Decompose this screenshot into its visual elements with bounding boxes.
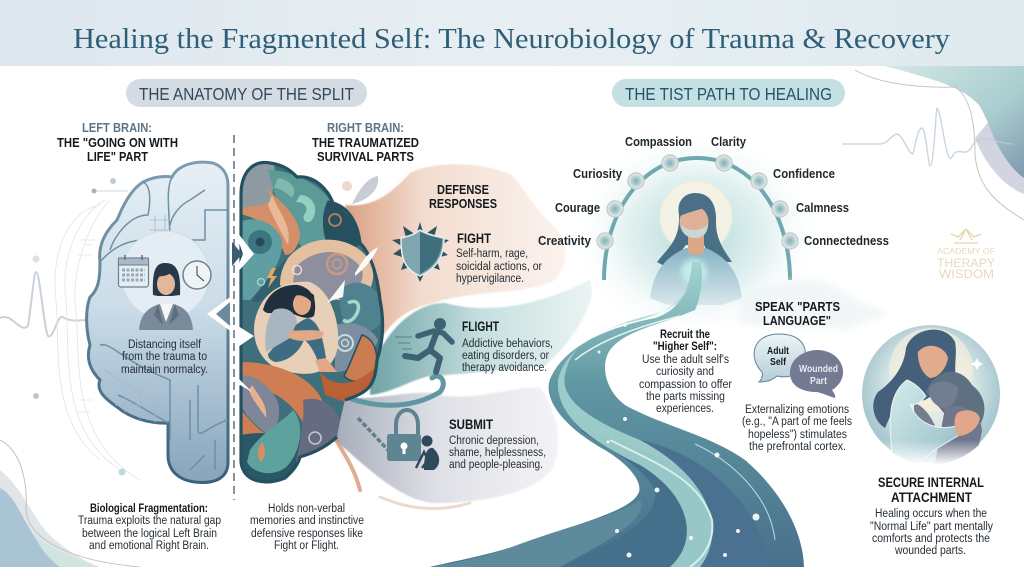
icon: wounded part speech bubble: Wounded <box>799 363 838 375</box>
icon: wounded part speech bubble <box>790 350 843 398</box>
neck <box>688 232 704 255</box>
foot <box>315 358 337 372</box>
text: left brain caption <box>121 339 208 376</box>
swirl: orange flame <box>240 186 300 255</box>
decorative swoosh: bottom left <box>0 440 140 567</box>
text: recruit the higher self: the parts missing <box>646 391 725 403</box>
icon: adult self speech bubble: Self <box>770 356 786 368</box>
text: secure internal attachment: comforts and protects the <box>872 533 990 545</box>
text: externalizing emotions: Externalizing emotions <box>745 404 849 416</box>
river dark lower band <box>560 430 738 567</box>
text: eight Cs labels: Curiosity <box>573 167 622 181</box>
decorative contour lines left of brain <box>55 200 140 480</box>
text: right brain caption <box>250 503 364 552</box>
logo: academy of therapy wisdom: WISDOM <box>939 267 994 281</box>
swirl: grey-blue <box>335 323 378 372</box>
section pill: anatomy of the split <box>126 79 367 107</box>
heading: left brain: THE "GOING ON WITH <box>57 136 178 150</box>
mother hand <box>954 410 980 436</box>
swirl: grey inner <box>292 252 363 300</box>
child head <box>929 381 958 408</box>
decorative pulse line: right <box>842 108 1012 166</box>
heading: right brain: RIGHT BRAIN: <box>327 121 404 135</box>
text: eight Cs labels <box>538 135 889 248</box>
text: right brain caption: memories and instinctive <box>250 515 364 527</box>
text: recruit the higher self: Use the adult self's <box>642 354 729 366</box>
decorative dots <box>32 178 128 476</box>
aura behind girl <box>254 282 338 374</box>
figure: woman in suit <box>139 263 193 330</box>
text: secure internal attachment: "Normal Life" part mentally <box>870 521 993 533</box>
divider: dashed split line <box>233 135 235 500</box>
text: secure internal attachment <box>870 475 993 557</box>
icon: adult self speech bubble: Adult <box>767 345 789 357</box>
text: secure internal attachment: wounded parts. <box>894 545 966 557</box>
text: biological fragmentation: Biological Fragmentation: <box>90 503 208 515</box>
face <box>293 293 311 315</box>
text: fight: FIGHT <box>457 231 492 246</box>
heading: speak parts language <box>755 300 840 328</box>
text: secure internal attachment: Healing occurs when the <box>875 508 987 520</box>
text: submit: SUBMIT <box>449 417 494 432</box>
figure: higher self with halo <box>650 181 742 305</box>
text: recruit the higher self: experiences. <box>656 403 714 415</box>
swirl: red orange <box>320 368 374 402</box>
text: externalizing emotions: hopeless") stimulates <box>748 429 847 441</box>
title: Healing the Fragmented Self: The Neurobiology of Trauma & Recovery <box>73 24 951 55</box>
swirl: teal spiral left <box>240 219 282 300</box>
text: fight <box>456 231 542 285</box>
white arrows <box>327 247 378 303</box>
text: recruit the higher self: Recruit the <box>660 329 710 341</box>
icon: clock <box>183 261 211 289</box>
text: defense responses heading: DEFENSE <box>437 183 489 197</box>
shirt <box>265 308 297 352</box>
shoulders <box>650 248 742 305</box>
healing river path <box>430 262 804 567</box>
text: eight Cs labels: Calmness <box>796 201 849 215</box>
panel blob: parts language <box>740 279 886 330</box>
text: biological fragmentation <box>78 503 221 552</box>
text: flight: therapy avoidance. <box>462 362 547 374</box>
left brain <box>87 162 228 482</box>
header band <box>0 0 1024 66</box>
swirl: upper teal <box>268 170 330 246</box>
text: eight Cs labels: Connectedness <box>804 234 889 248</box>
icon: running figure <box>395 318 452 372</box>
text: submit <box>449 417 546 471</box>
aura behind higher self <box>572 130 822 340</box>
text: eight Cs labels: Compassion <box>625 135 692 149</box>
text: biological fragmentation: Trauma exploits the natural gap <box>78 515 221 527</box>
swirl: top-left grey block <box>242 164 275 208</box>
text: fight: Self-harm, rage, <box>456 248 528 260</box>
text: externalizing emotions: the prefrontal cortex. <box>749 441 846 453</box>
zigzag split cracks <box>207 228 254 392</box>
arms <box>288 330 324 341</box>
icon: wounded part speech bubble: Part <box>810 375 827 387</box>
logo: academy of therapy wisdom: ACADEMY OF <box>937 247 995 256</box>
text: left brain caption: maintain normalcy. <box>121 364 208 376</box>
text: externalizing emotions: (e.g., "A part of me feels <box>742 416 852 428</box>
text: submit: shame, helplessness, <box>449 447 546 459</box>
text: recruit the higher self: curiosity and <box>656 366 714 378</box>
swirl: mid left dark <box>252 255 290 302</box>
swirl: right teal <box>340 283 383 331</box>
swirl: orange leaf <box>344 335 377 382</box>
swirl: beige arch <box>280 240 373 300</box>
figure: woman hugging knees <box>263 285 337 372</box>
chest glow <box>681 259 707 285</box>
mother hair <box>873 330 958 428</box>
text: biological fragmentation: between the logical Left Brain <box>82 528 217 540</box>
text: eight Cs labels: Confidence <box>773 167 835 181</box>
section pill: anatomy of the split: THE ANATOMY OF THE SPLIT <box>139 84 354 104</box>
text: flight: eating disorders, or <box>462 350 549 362</box>
child body <box>935 406 982 464</box>
text: flight: Addictive behaviors, <box>462 338 553 350</box>
icon: calendar <box>118 255 148 287</box>
child hair <box>926 372 984 425</box>
brain outline <box>241 162 383 482</box>
flight background <box>370 280 592 395</box>
text: left brain caption: from the trauma to <box>122 351 207 363</box>
logo: academy of therapy wisdom: THERAPY <box>937 256 995 270</box>
section pill: TIST path <box>612 79 845 107</box>
heading: left brain: LIFE" PART <box>87 150 148 164</box>
text: secure internal attachment: SECURE INTERNAL <box>878 475 984 490</box>
decorative flow ribbons <box>330 176 470 509</box>
logo: academy of therapy wisdom <box>937 229 995 281</box>
text: submit: and people-pleasing. <box>449 459 543 471</box>
text: fight: hypervigilance. <box>456 273 524 285</box>
heading: speak parts language: SPEAK "PARTS <box>755 300 840 314</box>
text: biological fragmentation: and emotional Right Brain. <box>89 540 209 552</box>
text: right brain caption: Fight or Flight. <box>274 540 339 552</box>
section pill: TIST path: THE TIST PATH TO HEALING <box>625 84 832 104</box>
mother face <box>918 346 948 378</box>
healing arc of eight Cs <box>597 155 798 280</box>
text: secure internal attachment: ATTACHMENT <box>891 490 973 505</box>
text: eight Cs labels: Clarity <box>711 135 746 149</box>
swirl: bottom dark <box>242 433 300 480</box>
text: recruit the higher self <box>639 329 732 415</box>
fight background <box>345 164 565 350</box>
right brain <box>240 160 383 490</box>
illustration: secure internal attachment hug <box>860 325 1000 466</box>
heading: speak parts language: LANGUAGE" <box>763 314 831 328</box>
text: flight: FLIGHT <box>462 319 500 334</box>
heading: right brain <box>312 121 419 164</box>
mother sweater <box>890 380 958 466</box>
swirl: dark upper right <box>322 200 360 246</box>
text: left brain caption: Distancing itself <box>128 339 202 351</box>
text: fight: soicidal actions, or <box>456 261 542 273</box>
text: recruit the higher self: compassion to offer <box>639 379 732 391</box>
text: submit: Chronic depression, <box>449 435 539 447</box>
text: flight <box>462 319 553 374</box>
text: defense responses heading: RESPONSES <box>429 197 497 211</box>
submit background <box>335 388 558 503</box>
circuit traces <box>100 177 228 470</box>
text: eight Cs labels: Courage <box>555 201 600 215</box>
text: eight Cs labels: Creativity <box>538 234 591 248</box>
hair <box>657 193 732 268</box>
panel: defense responses backgrounds <box>335 164 592 503</box>
river sparkles <box>598 323 760 558</box>
decorative swoosh: top right <box>855 66 1024 220</box>
icon: spiked shield <box>392 222 449 282</box>
heading: left brain: LEFT BRAIN: <box>82 121 152 135</box>
face <box>680 206 708 238</box>
heading: right brain: THE TRAUMATIZED <box>312 136 419 150</box>
hair <box>263 285 315 318</box>
heading: right brain: SURVIVAL PARTS <box>317 150 414 164</box>
swirl: bottom orange and grey flows <box>242 362 322 422</box>
bottom white band <box>0 567 1024 576</box>
river highlight bands <box>558 280 730 567</box>
legs <box>268 318 326 362</box>
text: defense responses heading <box>429 183 497 211</box>
text: externalizing emotions <box>742 404 852 453</box>
icon: adult self speech bubble <box>754 334 806 382</box>
text: recruit the higher self: "Higher Self": <box>653 341 717 353</box>
icon: padlock and chain with huddled figure <box>358 410 439 470</box>
heading: left brain <box>57 121 178 164</box>
text: right brain caption: Holds non-verbal <box>268 503 345 515</box>
decorative pulse line: left <box>0 272 92 336</box>
child hand <box>914 404 935 426</box>
bottom fade <box>882 442 980 464</box>
text: right brain caption: defensive responses like <box>251 528 363 540</box>
